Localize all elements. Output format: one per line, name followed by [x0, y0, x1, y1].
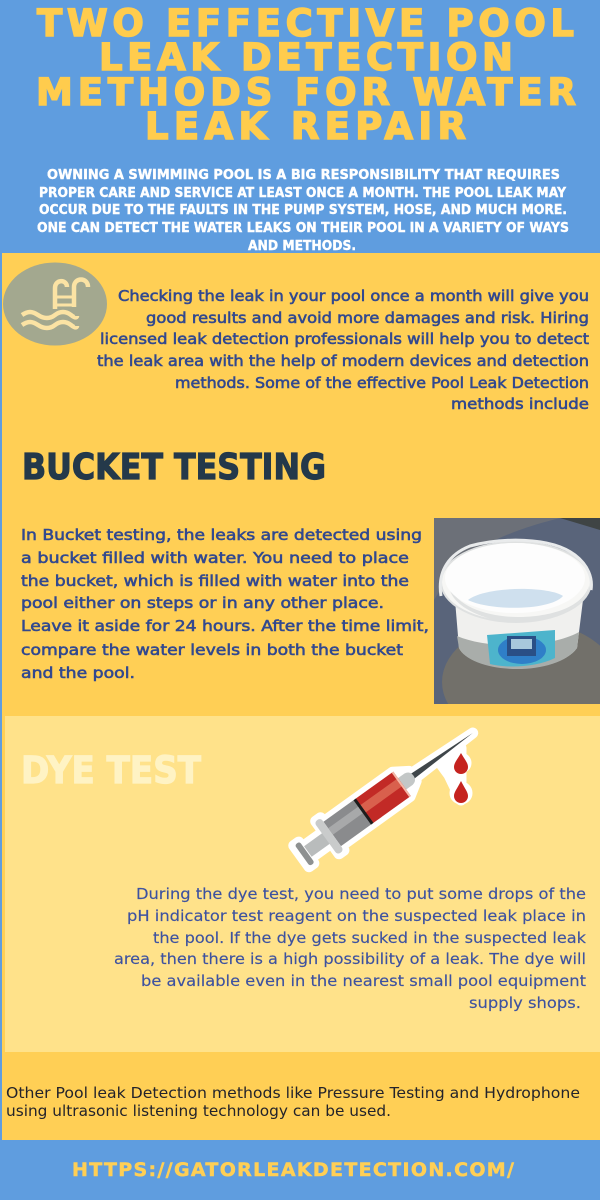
- text block: bucket testing: a bucket filled with water. You need to place: [21, 549, 409, 567]
- text block: dye test: area, then there is a high possibility of a leak. The dye will: [114, 950, 586, 968]
- text block: dye test: be available even in the nearest small pool equipment: [141, 972, 586, 990]
- intro text: OWNING A SWIMMING POOL IS A BIG RESPONSIBILITY THAT REQUIRES: [47, 168, 560, 183]
- photo: white bucket on pool step: [434, 518, 600, 704]
- title: METHODS FOR WATER: [36, 71, 576, 114]
- text block: intro paragraph: [97, 287, 589, 413]
- text block: other methods: Other Pool leak Detection methods like Pressure Testing and Hydrophone: [6, 1084, 580, 1102]
- syringe body: [291, 717, 484, 872]
- heading: dye test: DYE TEST: [21, 749, 202, 792]
- heading: bucket testing: BUCKET TESTING: [22, 447, 326, 488]
- title: LEAK DETECTION: [99, 36, 513, 79]
- text block: bucket testing: pool either on steps or in any other place.: [21, 594, 384, 612]
- text block: intro paragraph: the leak area with the help of modern devices and detection: [97, 352, 589, 370]
- text block: bucket testing: compare the water levels in both the bucket: [21, 641, 403, 659]
- text block: intro paragraph: methods. Some of the effective Pool Leak Detection: [175, 374, 589, 392]
- title: TWO EFFECTIVE POOL: [37, 2, 574, 45]
- panel: other methods: [2, 1052, 600, 1140]
- panel: dye test: [5, 716, 600, 1052]
- panel: introduction and bucket testing: [2, 253, 600, 1052]
- text block: other methods: [6, 1084, 580, 1120]
- syringe sticker outline: [290, 717, 484, 872]
- intro text: [37, 168, 569, 254]
- text block: intro paragraph: licensed leak detection professionals will help you to detect: [100, 330, 589, 348]
- text block: dye test: supply shops.: [469, 994, 581, 1012]
- icon: swimming pool ladder: [3, 262, 107, 346]
- intro text: PROPER CARE AND SERVICE AT LEAST ONCE A MONTH. THE POOL LEAK MAY: [39, 186, 567, 201]
- text block: other methods: using ultrasonic listening technology can be used.: [6, 1102, 391, 1120]
- intro text: OCCUR DUE TO THE FAULTS IN THE PUMP SYSTEM, HOSE, AND MUCH MORE.: [39, 203, 567, 218]
- text block: intro paragraph: Checking the leak in your pool once a month will give you: [118, 287, 589, 305]
- text block: bucket testing: [21, 526, 429, 682]
- text block: dye test: [114, 885, 586, 1012]
- text block: bucket testing: In Bucket testing, the leaks are detected using: [21, 526, 422, 544]
- text block: intro paragraph: methods include: [451, 395, 589, 413]
- text block: dye test: pH indicator test reagent on the suspected leak place in: [127, 907, 586, 925]
- text block: bucket testing: the bucket, which is filled with water into the: [21, 572, 409, 590]
- icon: syringe with red drops: [290, 717, 484, 872]
- text block: dye test: During the dye test, you need to put some drops of the: [136, 885, 586, 903]
- text block: bucket testing: Leave it aside for 24 hours. After the time limit,: [21, 617, 429, 635]
- footer url: HTTPS://GATORLEAKDETECTION.COM/: [72, 1159, 514, 1181]
- text block: dye test: the pool. If the dye gets sucked in the suspected leak: [153, 929, 586, 947]
- red drops: [454, 753, 468, 774]
- text block: intro paragraph: good results and avoid more damages and risk. Hiring: [146, 309, 589, 327]
- intro text: ONE CAN DETECT THE WATER LEAKS ON THEIR POOL IN A VARIETY OF WAYS: [37, 221, 569, 236]
- text block: bucket testing: and the pool.: [21, 664, 135, 682]
- title: [36, 2, 576, 148]
- title: LEAK REPAIR: [145, 105, 466, 148]
- intro text: AND METHODS.: [248, 239, 356, 254]
